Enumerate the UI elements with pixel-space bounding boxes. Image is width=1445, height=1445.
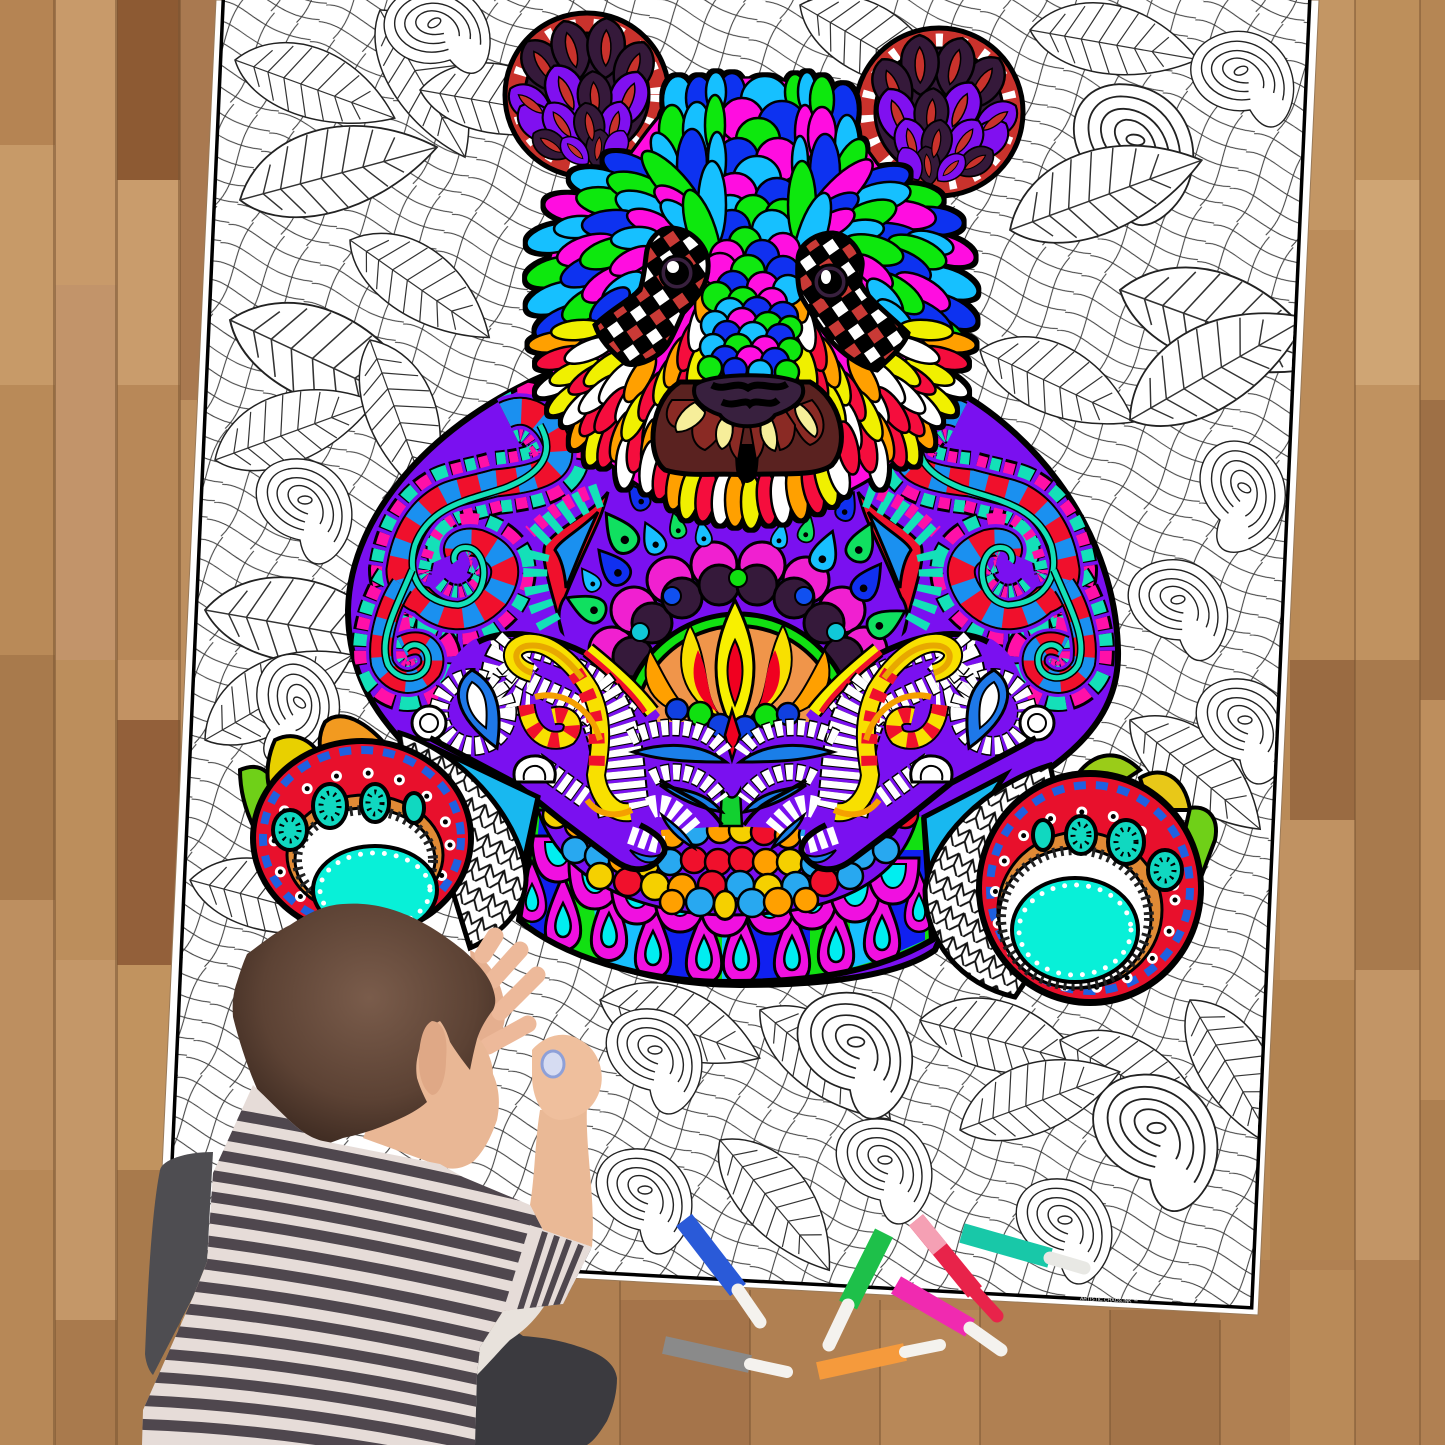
nose: [694, 375, 803, 426]
panda illustration: [240, 13, 1216, 1006]
near arm: [530, 1105, 593, 1247]
chest teardrops: [562, 479, 911, 643]
ear: [419, 1021, 447, 1095]
striped shirt: [130, 1080, 610, 1445]
lower arm paisleys left: [412, 632, 726, 869]
marker: red: [916, 1220, 997, 1316]
nose bridge scales: [698, 227, 803, 384]
head underlay: [545, 79, 951, 515]
central purple heart: [630, 722, 845, 830]
right leg: [924, 765, 1080, 997]
hair: [233, 904, 495, 1152]
marker: magenta: [896, 1285, 1001, 1350]
right eye patch: [798, 233, 908, 370]
marker: blue: [684, 1220, 760, 1322]
cheek fringe left: [527, 268, 721, 490]
belly rainbow scales: [543, 802, 918, 919]
knee and trousers: [145, 1152, 617, 1445]
face and neck: [363, 1010, 499, 1169]
flower buds: [666, 699, 799, 826]
left eye patch: [595, 228, 708, 364]
left ear: [501, 13, 669, 177]
far hand: [470, 936, 537, 1055]
head feathers and forehead: [522, 72, 982, 529]
left leg: [400, 733, 538, 948]
markers: [664, 1220, 1084, 1372]
left paw: [250, 738, 474, 938]
lower belly: [522, 806, 929, 979]
snout: [653, 382, 841, 482]
right paw: [976, 770, 1204, 1006]
cheek fringe right: [783, 268, 977, 490]
marker: gray: [664, 1345, 787, 1372]
copyright line: ARTISTIC CHAOS.INK ™: [1080, 1296, 1138, 1305]
hand holding marker: [532, 1035, 602, 1120]
doodle background: [160, 0, 1345, 1320]
lower arm paisleys right: [740, 632, 1054, 869]
back toes: [240, 716, 1216, 880]
belly outline: [519, 797, 932, 982]
swirl left: [381, 411, 608, 682]
marker: orange: [818, 1345, 940, 1371]
side feathers: [522, 143, 982, 360]
body: [348, 375, 1118, 985]
swirl right: [858, 411, 1085, 682]
marker: teal: [962, 1233, 1084, 1268]
marker: green: [829, 1233, 884, 1345]
poster sheet: [158, 0, 1319, 1315]
marker in hand: [542, 1051, 564, 1077]
child drawing on poster: [130, 904, 617, 1445]
bottom fringe: [636, 417, 863, 529]
right ear: [855, 28, 1025, 196]
forehead domes: [645, 72, 874, 250]
chest medallion: [589, 542, 887, 735]
